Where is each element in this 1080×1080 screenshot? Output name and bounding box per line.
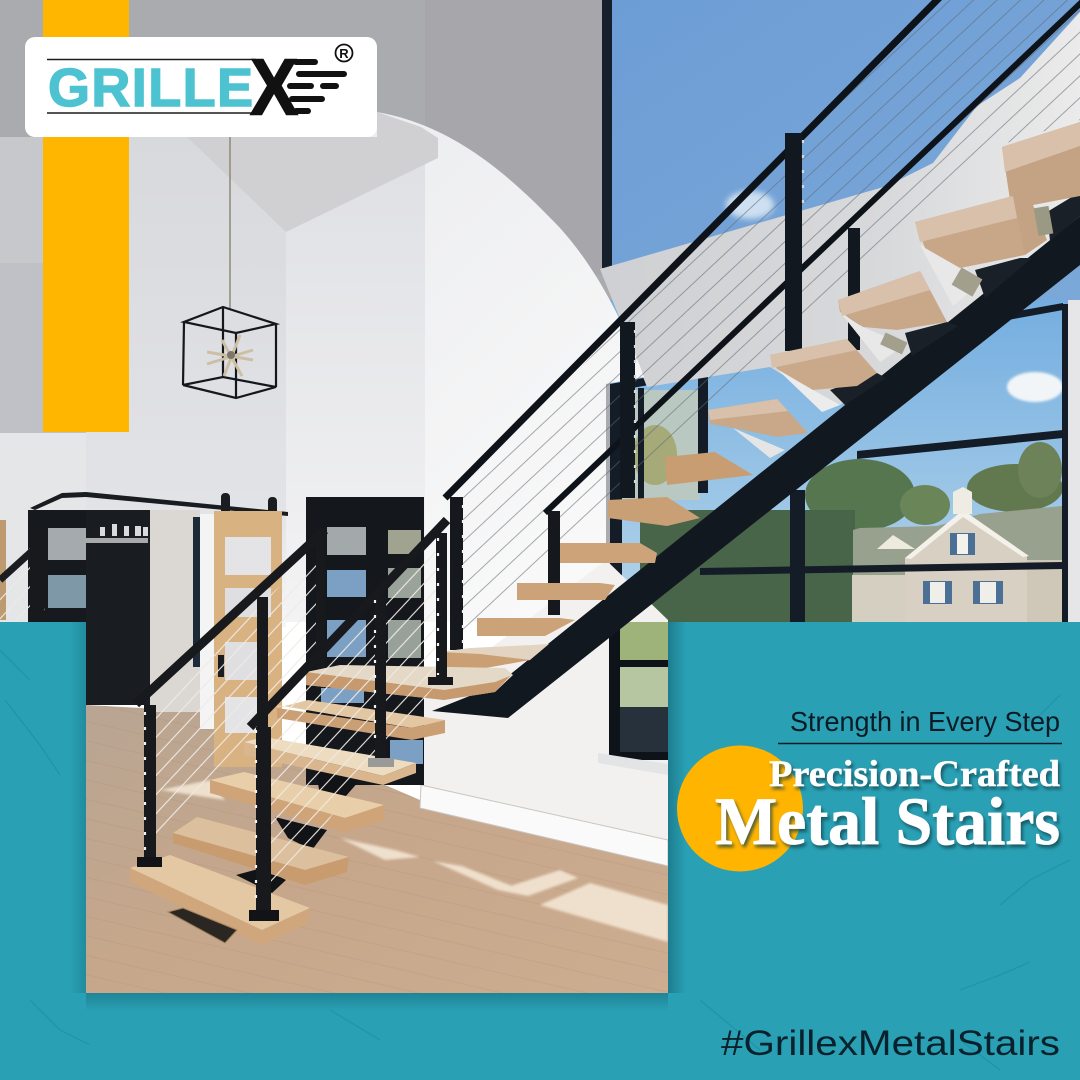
lower handrails and posts (0, 140, 803, 921)
barn door track (30, 492, 288, 527)
pivot tread (306, 665, 513, 700)
sunlight patches (160, 780, 668, 942)
registered mark: R (339, 46, 349, 61)
right wall beside window (1068, 300, 1080, 622)
tagline rule (778, 742, 1062, 744)
heading: Metal Stairs: Metal Stairs (715, 783, 1060, 859)
yellow circle accent (677, 746, 803, 872)
tread nine (517, 583, 615, 600)
upper floating treads (477, 122, 1080, 636)
tread ten (477, 618, 575, 636)
tread (277, 700, 445, 740)
front entry door with glass (306, 497, 424, 785)
tread two (915, 196, 1032, 306)
grey wall outside the arch (0, 0, 1080, 623)
upper stair wires (463, 0, 1080, 640)
logo X: X (250, 42, 298, 132)
white arch walls (86, 112, 644, 627)
tread three (838, 271, 958, 362)
lower centre stringer pieces (236, 772, 360, 893)
tread four (770, 339, 886, 412)
tread (210, 772, 384, 832)
tread six (665, 452, 753, 485)
cable fittings (145, 140, 803, 905)
tread one (1002, 122, 1080, 255)
logo speed lines (290, 62, 344, 111)
pendant cube light (183, 137, 276, 398)
upper handrails and posts (445, 0, 1080, 650)
trees (622, 390, 1063, 622)
teal marble panel (0, 622, 1080, 1080)
marble veins (0, 650, 1070, 1070)
yellow vertical bar (43, 0, 129, 432)
logo wordmark: GRILLE (48, 58, 253, 118)
heading: Precision-Crafted: Precision-Crafted (769, 754, 1060, 795)
tread seven (608, 497, 700, 526)
tread five (708, 399, 808, 458)
tread (173, 817, 349, 885)
registered mark (336, 44, 352, 62)
main steel stringer (432, 216, 1080, 718)
tread eight (560, 543, 657, 563)
lower window with garden view (610, 300, 1068, 622)
lower cable wires (0, 532, 445, 900)
wooden barn door (214, 511, 282, 767)
dark panel left with chandelier (0, 510, 215, 729)
lower right window (598, 622, 668, 775)
house (852, 487, 1063, 622)
wall under stairs with baseboard (420, 560, 668, 866)
logo rules (47, 60, 256, 113)
hashtag: #GrillexMetalStairs (721, 1024, 1060, 1063)
logo card (25, 37, 377, 137)
bottom tread (130, 855, 310, 945)
tagline: Strength in Every Step (790, 706, 1060, 737)
upper wall wedge behind railing (600, 12, 1080, 405)
lower wide treads (130, 644, 549, 945)
sloped ceiling (187, 112, 438, 232)
tall upper window with sky (602, 0, 1080, 310)
landing tread (440, 644, 549, 669)
floor (86, 705, 668, 993)
tread (244, 737, 416, 785)
window frames (610, 303, 1068, 622)
photo shadow on teal (70, 622, 686, 1011)
floor anchor plate (168, 908, 237, 943)
